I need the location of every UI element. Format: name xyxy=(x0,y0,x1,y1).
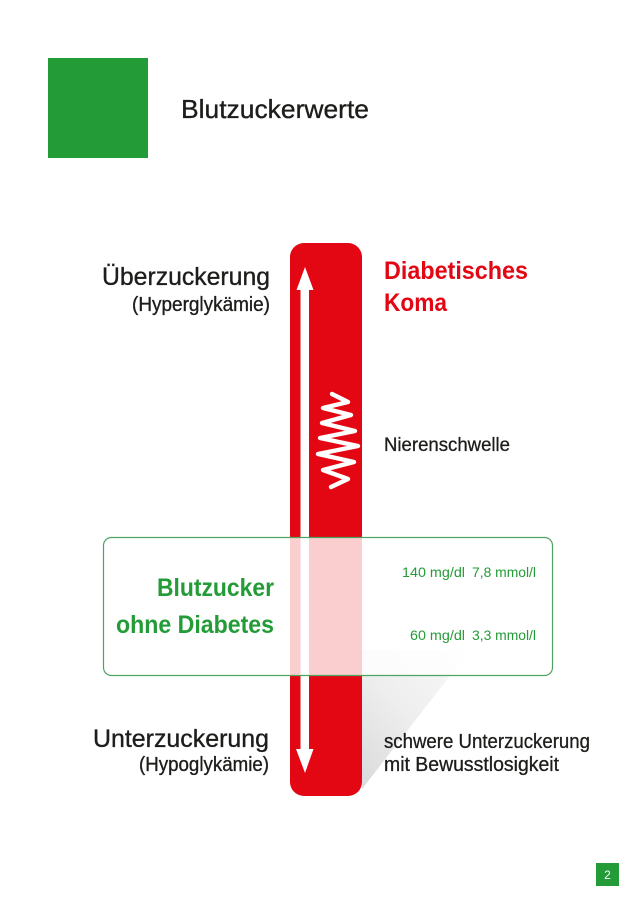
panel heading xyxy=(116,574,274,639)
upper limit values: 140 mg/dl xyxy=(402,564,465,580)
label: diabetic coma: Koma xyxy=(384,289,448,317)
label: hypoglycemia: Unterzuckerung xyxy=(93,725,269,753)
page number badge xyxy=(596,863,619,886)
label: renal threshold: Nierenschwelle xyxy=(384,435,510,456)
page curl shadow xyxy=(362,650,470,789)
panel heading: Blutzucker xyxy=(157,574,274,602)
lower limit values: 60 mg/dl xyxy=(410,627,465,643)
page number badge: 2 xyxy=(604,868,611,882)
label: hyperglycemia: Überzuckerung xyxy=(102,263,270,291)
label: hypoglycemia xyxy=(93,725,269,776)
panel box xyxy=(104,538,552,676)
label: severe hypoglycemia: mit Bewusstlosigkeit xyxy=(384,754,559,776)
green header square xyxy=(48,58,148,158)
lower limit values: 3,3 mmol/l xyxy=(472,627,536,643)
arrow: up and down range xyxy=(296,267,314,773)
title: Blutzuckerwerte xyxy=(181,94,369,124)
upper limit values: 7,8 mmol/l xyxy=(472,564,536,580)
panel heading: ohne Diabetes xyxy=(116,611,274,639)
label: severe hypoglycemia xyxy=(384,731,590,776)
icon: kidney threshold zigzag xyxy=(318,394,358,487)
label: diabetic coma xyxy=(384,257,528,317)
label: diabetic coma: Diabetisches xyxy=(384,257,528,285)
label: hyperglycemia: (Hyperglykämie) xyxy=(132,294,270,316)
label: severe hypoglycemia: schwere Unterzuckerung xyxy=(384,731,590,753)
red scale bar xyxy=(290,243,362,796)
label: hyperglycemia xyxy=(102,263,270,316)
label: hypoglycemia: (Hypoglykämie) xyxy=(139,754,269,776)
lower limit values xyxy=(410,627,536,643)
panel: blood sugar without diabetes xyxy=(104,538,552,676)
upper limit values xyxy=(402,564,536,580)
